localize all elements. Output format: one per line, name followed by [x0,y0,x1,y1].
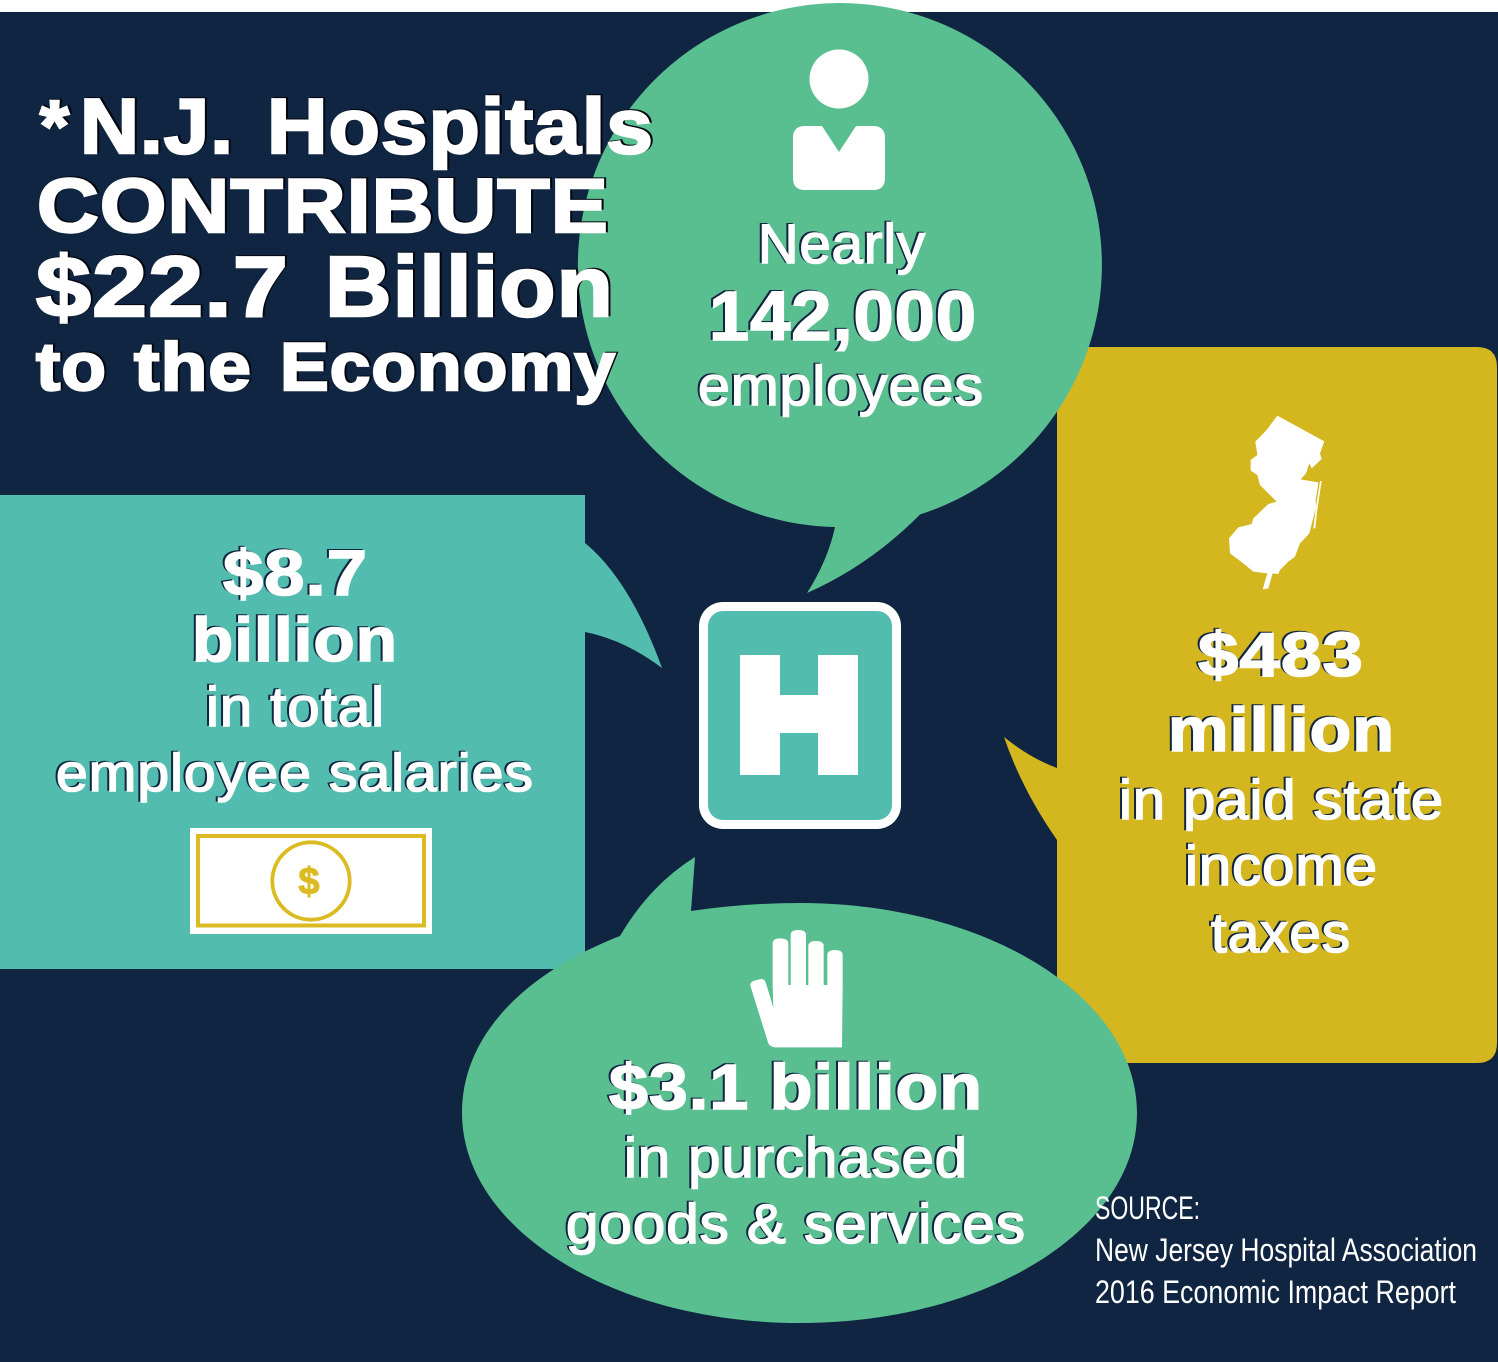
title: CONTRIBUTE [37,164,609,249]
icon: dollar bill: $ [298,861,320,903]
title: $22.7 [36,240,289,335]
title: Hospitals [267,82,654,170]
title: to [36,329,107,405]
icon: New Jersey map [1229,416,1324,589]
icon: hand [750,930,843,1047]
title: the [134,329,252,405]
text: $8.7 billion in total employee salaries: employee salaries [56,744,534,803]
text: $8.7 billion in total employee salaries: $8.7 [223,537,368,609]
text: $483 million in paid state income taxes [1119,621,1444,964]
title: Billion [325,240,614,335]
text: $483 million in paid state income taxes: income [1185,834,1378,897]
source note: SOURCE: [1095,1190,1200,1226]
title: Economy [280,329,616,405]
text: $483 million in paid state income taxes: in paid state [1119,768,1444,831]
text: nearly 142,000 employees: Nearly [758,212,926,275]
text: $483 million in paid state income taxes: $483 [1198,621,1364,690]
title [36,82,654,405]
panel: state income taxes [1004,347,1497,1063]
icon: dollar bill [190,828,432,934]
icon: person [793,50,885,190]
panel: purchased goods speech bubble [462,857,1137,1323]
text: nearly 142,000 employees [698,212,984,417]
text: nearly 142,000 employees: employees [698,354,984,417]
text: $3.1 billion in purchased goods & services: $3.1 billion [609,1051,983,1123]
text: $8.7 billion in total employee salaries: billion [192,606,398,675]
text: $3.1 billion in purchased goods & services: in purchased [624,1126,968,1189]
title: N.J. [80,82,234,170]
text: $483 million in paid state income taxes: taxes [1211,901,1351,964]
text: $8.7 billion in total employee salaries [56,537,534,803]
text: $3.1 billion in purchased goods & services [566,1051,1026,1255]
text: $3.1 billion in purchased goods & services: goods & services [566,1192,1026,1255]
icon: hospital H sign [699,602,901,829]
text: $8.7 billion in total employee salaries: in total [206,675,385,738]
title: * [40,87,70,167]
text: $483 million in paid state income taxes: million [1168,696,1395,765]
panel: employee salaries [0,495,662,969]
panel: employees speech bubble [578,3,1102,593]
source note [1095,1190,1477,1310]
text: nearly 142,000 employees: 142,000 [709,277,977,355]
